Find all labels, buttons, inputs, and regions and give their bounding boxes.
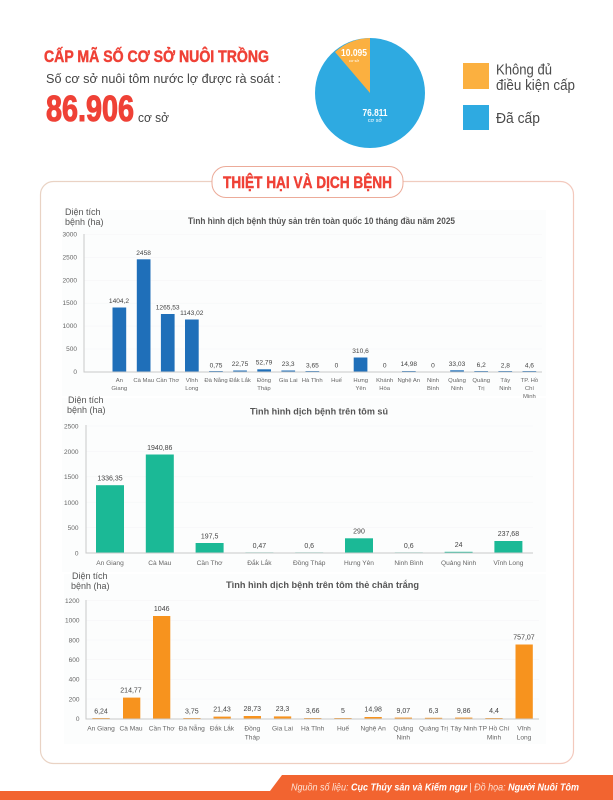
value labels: 1336,35 xyxy=(97,476,123,482)
category labels: Tây xyxy=(500,378,510,384)
category labels: Minh xyxy=(487,734,501,742)
value labels: 0,6 xyxy=(304,543,314,550)
category labels: Giang xyxy=(111,386,127,392)
value labels: 28,73 xyxy=(244,706,261,713)
y axis ticks: 1000 xyxy=(63,323,77,330)
value labels: 0 xyxy=(383,362,387,370)
category labels: Cà Mau xyxy=(133,378,154,384)
category labels: Đắk Lắk xyxy=(229,377,251,384)
bars xyxy=(92,616,533,719)
category labels: Ninh xyxy=(427,378,439,384)
chart title: Tình hình dịch bệnh thủy sản trên toàn quốc 10 tháng đầu năm 2025 xyxy=(188,216,455,226)
y axis title: Diện tích xyxy=(72,571,108,581)
y axis title xyxy=(71,571,110,591)
value labels: 23,3 xyxy=(276,706,289,713)
value labels: 23,3 xyxy=(282,361,295,368)
value labels: 1940,86 xyxy=(147,445,173,452)
value labels: 1404,2 xyxy=(109,298,129,305)
value labels: 2,8 xyxy=(501,362,510,370)
value labels: 757,07 xyxy=(513,634,535,642)
category labels: Đắk Lắk xyxy=(210,724,235,732)
y axis ticks: 1000 xyxy=(64,500,79,507)
y axis title: bệnh (ha) xyxy=(71,581,110,591)
value labels: 14,98 xyxy=(364,706,382,714)
axes xyxy=(84,234,542,372)
y axis ticks: 0 xyxy=(76,716,80,723)
category labels: Bình xyxy=(427,386,439,392)
category labels: Đồng xyxy=(244,724,261,732)
value labels: 21,43 xyxy=(213,706,231,714)
y axis ticks: 200 xyxy=(69,696,80,703)
y axis ticks: 2000 xyxy=(64,449,79,456)
text: số cơ sở được rà soát: Số cơ sở nuôi tôm nước lợ được rà soát : xyxy=(46,71,281,86)
category labels: Ninh xyxy=(397,734,410,742)
category labels: Tháp xyxy=(245,734,260,742)
category labels: Hà Tĩnh xyxy=(302,378,323,384)
category labels: Hòa xyxy=(379,386,391,392)
category labels: Trị xyxy=(478,386,485,392)
y axis ticks: 1500 xyxy=(64,474,79,481)
y axis ticks xyxy=(64,424,79,558)
big number: total facilities: cơ sở xyxy=(138,111,169,125)
section heading pill: THIỆT HẠI VÀ DỊCH BỆNH xyxy=(223,173,392,192)
value labels: 5 xyxy=(341,708,345,715)
value labels: 197,5 xyxy=(201,534,218,540)
category labels: Nghệ An xyxy=(361,726,386,732)
value labels xyxy=(97,445,519,550)
value labels: 2458 xyxy=(136,250,151,257)
y axis title xyxy=(67,395,106,415)
value labels: 22,75 xyxy=(232,361,249,368)
category labels: Cần Thơ xyxy=(156,378,179,384)
heading: cấp mã số cơ sở nuôi trồng: CẤP MÃ SỐ CƠ SỞ NUÔI TRỒNG xyxy=(44,46,269,66)
category labels: Cà Mau xyxy=(148,560,172,567)
y axis ticks: 800 xyxy=(69,637,80,644)
value labels: 3,75 xyxy=(185,708,199,716)
y axis ticks: 3000 xyxy=(63,232,77,238)
legend: Không đủ xyxy=(496,62,552,78)
y axis ticks: 1500 xyxy=(63,300,77,307)
y axis title: bệnh (ha) xyxy=(65,217,104,227)
chart title: Tình hình dịch bệnh trên tôm thẻ chân trắng xyxy=(226,579,419,590)
pie chart: certification status: cơ sở xyxy=(349,58,360,63)
category labels: Yên xyxy=(355,386,366,392)
chart: toàn quốc xyxy=(62,207,546,400)
category labels: Long xyxy=(517,734,532,742)
value labels: 0,47 xyxy=(253,543,266,550)
value labels: 237,68 xyxy=(498,531,519,538)
value labels: 214,77 xyxy=(120,688,142,694)
axes xyxy=(86,600,539,719)
value labels xyxy=(109,250,534,370)
category labels: Cần Thơ xyxy=(197,558,223,567)
category labels: TP. Hồ xyxy=(521,378,539,384)
legend: Đã cấp xyxy=(496,111,540,127)
value labels: 310,6 xyxy=(352,348,369,355)
legend xyxy=(463,62,575,130)
y axis ticks: 500 xyxy=(68,525,79,532)
y axis ticks: 0 xyxy=(73,369,77,376)
pie chart: certification status: 10.095 xyxy=(341,47,367,59)
category labels: Cà Mau xyxy=(119,726,143,732)
bars xyxy=(112,259,536,372)
category labels: Đà Nẵng xyxy=(204,377,228,384)
big number: total facilities: 86.906 xyxy=(46,88,134,129)
value labels: 33,03 xyxy=(449,361,466,368)
value labels: 0,6 xyxy=(404,543,414,550)
legend: điều kiện cấp xyxy=(496,78,575,94)
category labels: Vĩnh xyxy=(186,378,198,384)
category labels xyxy=(96,558,524,567)
y axis title xyxy=(65,207,104,227)
chart: tôm sú xyxy=(62,395,546,572)
category labels xyxy=(87,724,532,742)
y axis title: Diện tích xyxy=(68,395,104,405)
category labels xyxy=(111,377,539,400)
value labels: 3,66 xyxy=(306,708,320,715)
category labels: Ninh Bình xyxy=(394,560,424,567)
y axis title: bệnh (ha) xyxy=(67,405,106,415)
category labels: Gia Lai xyxy=(272,726,293,732)
value labels: 0 xyxy=(431,362,435,370)
category labels: Hưng xyxy=(353,378,368,384)
category labels: An xyxy=(116,378,123,384)
pie chart: certification status xyxy=(315,38,425,148)
value labels: 290 xyxy=(353,528,365,536)
value labels: 6,3 xyxy=(429,708,438,715)
category labels: Huế xyxy=(337,724,349,732)
category labels: Quảng Ninh xyxy=(441,560,477,567)
category labels: Chí xyxy=(525,386,534,392)
footer band xyxy=(0,775,613,800)
y axis title: Diện tích xyxy=(65,207,101,217)
category labels: Đồng Tháp xyxy=(293,558,326,567)
y axis ticks: 2500 xyxy=(63,254,77,262)
section heading pill xyxy=(212,166,403,198)
y axis ticks: 0 xyxy=(75,550,79,558)
y axis ticks xyxy=(63,232,77,376)
value labels: 4,4 xyxy=(489,708,499,715)
y axis ticks: 500 xyxy=(66,346,77,353)
y axis ticks: 400 xyxy=(69,677,80,684)
y axis ticks: 600 xyxy=(69,657,80,664)
category labels: An Giang xyxy=(96,560,124,567)
value labels: 9,86 xyxy=(457,708,471,715)
category labels: Vĩnh Long xyxy=(493,560,524,567)
footer source text: Nguồn số liệu: Cục Thủy sản và Kiếm ngư | Đồ họa: Người Nuôi Tôm xyxy=(291,782,579,794)
category labels: Quảng Trị xyxy=(419,726,449,732)
category labels: Gia Lai xyxy=(279,378,298,384)
category labels: Đồng xyxy=(257,378,271,384)
category labels: Ninh xyxy=(499,386,511,392)
value labels: 1265,53 xyxy=(156,304,180,312)
panel: thiệt hại và dịch bệnh xyxy=(40,182,574,764)
category labels: Quảng xyxy=(448,378,466,384)
category labels: Nghệ An xyxy=(397,378,420,384)
value labels xyxy=(94,606,535,716)
value labels: 3,65 xyxy=(306,362,319,370)
category labels: Quảng xyxy=(472,378,490,384)
pie chart: certification status: 76.811 xyxy=(362,107,388,119)
category labels: Quảng xyxy=(393,726,414,732)
value labels: 14,98 xyxy=(401,361,417,368)
category labels: Hưng Yên xyxy=(344,560,374,567)
value labels: 9,07 xyxy=(396,708,410,715)
y axis ticks: 2500 xyxy=(64,424,79,430)
category labels: Khánh xyxy=(376,378,393,384)
value labels: 0,75 xyxy=(210,362,223,370)
value labels: 1143,02 xyxy=(180,310,204,317)
axes xyxy=(86,425,533,553)
category labels: An Giang xyxy=(87,726,115,732)
value labels: 0 xyxy=(335,362,339,370)
chart: tôm thẻ chân trắng xyxy=(64,571,546,744)
category labels: Minh xyxy=(523,394,536,400)
category labels: Tháp xyxy=(257,386,271,392)
bars xyxy=(96,454,522,553)
category labels: Ninh xyxy=(451,386,463,392)
category labels: Đắk Lắk xyxy=(247,558,272,567)
y axis ticks: 2000 xyxy=(63,277,77,284)
pie chart: certification status: cơ sở xyxy=(368,117,383,124)
value labels: 24 xyxy=(455,542,463,549)
category labels: TP Hồ Chí xyxy=(479,724,509,732)
y axis ticks xyxy=(65,598,80,723)
y axis ticks: 1200 xyxy=(65,598,80,605)
value labels: 6,24 xyxy=(94,708,108,716)
category labels: Vĩnh xyxy=(517,726,531,732)
category labels: Tây Ninh xyxy=(451,726,477,732)
category labels: Hà Tĩnh xyxy=(301,726,325,732)
category labels: Long xyxy=(185,386,198,392)
value labels: 52,79 xyxy=(256,360,273,366)
chart title: Tình hình dịch bệnh trên tôm sú xyxy=(250,406,388,416)
value labels: 4,6 xyxy=(525,362,534,370)
value labels: 6,2 xyxy=(477,362,486,369)
category labels: Đà Nẵng xyxy=(179,724,205,732)
y axis ticks: 1000 xyxy=(65,618,80,625)
value labels: 1046 xyxy=(154,606,170,613)
category labels: Huế xyxy=(331,378,343,384)
category labels: Cần Thơ xyxy=(149,724,175,732)
